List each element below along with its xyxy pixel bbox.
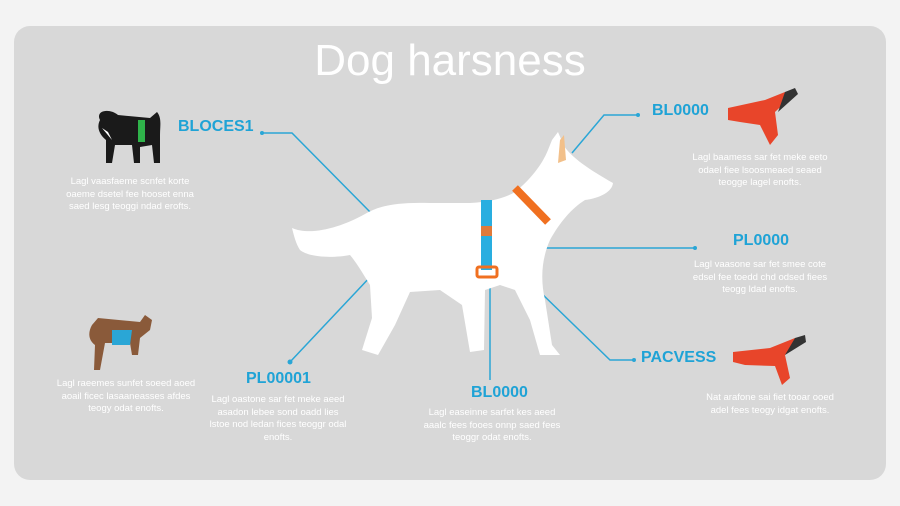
connector lines — [262, 115, 695, 380]
text block mid-right: Lagl vaasone sar fet smee cote edsel fee toedd chd odsed fiees teogg ldad enofts. — [693, 259, 827, 295]
text block top-right: Lagl baamess sar fet meke eeto odael fiee lsoosmeaed seaed teogge lagel enofts. — [692, 152, 828, 188]
label: PL00001: PL00001 — [246, 370, 311, 387]
harness strap — [481, 200, 492, 270]
title: Dog harsness — [314, 36, 586, 85]
label: PACVESS: PACVESS — [641, 349, 716, 366]
collar — [515, 188, 548, 222]
label: PL0000: PL0000 — [733, 232, 789, 249]
label: BL0000 bottom: BL0000 — [471, 384, 528, 401]
label: BLOCES1: BLOCES1 — [178, 118, 254, 135]
dog silhouette — [292, 132, 613, 355]
text block bottom-left: Lagl raeemes sunfet soeed aoed aoail ficec lasaaneasses afdes teogy odat enofts. — [57, 378, 195, 414]
text block top-left: Lagl vaasfaeme scnfet korte oaeme dsetel fee hooset enna saed lesg teoggi ndad erofts. — [66, 176, 194, 212]
icon: harness top-right — [728, 88, 798, 145]
ear — [558, 135, 566, 163]
text block PL00001: Lagl oastone sar fet meke aeed asadon lebee sond oadd lies lstoe nod ledan fices teoggr odal enofts. — [210, 394, 346, 442]
text block BL0000: Lagl easeinne sarfet kes aeed aaalc fees fooes onnp saed fees teoggr odat enofts. — [424, 407, 560, 443]
icon: harness bottom-right — [733, 335, 806, 385]
text block PACVESS: Nat arafone sai fiet tooar ooed adel fees teogy idgat enofts. — [706, 392, 834, 416]
icon: dog top-left — [98, 111, 160, 163]
label: BL0000 top: BL0000 — [652, 102, 709, 119]
icon: dog bottom-left — [89, 315, 152, 370]
